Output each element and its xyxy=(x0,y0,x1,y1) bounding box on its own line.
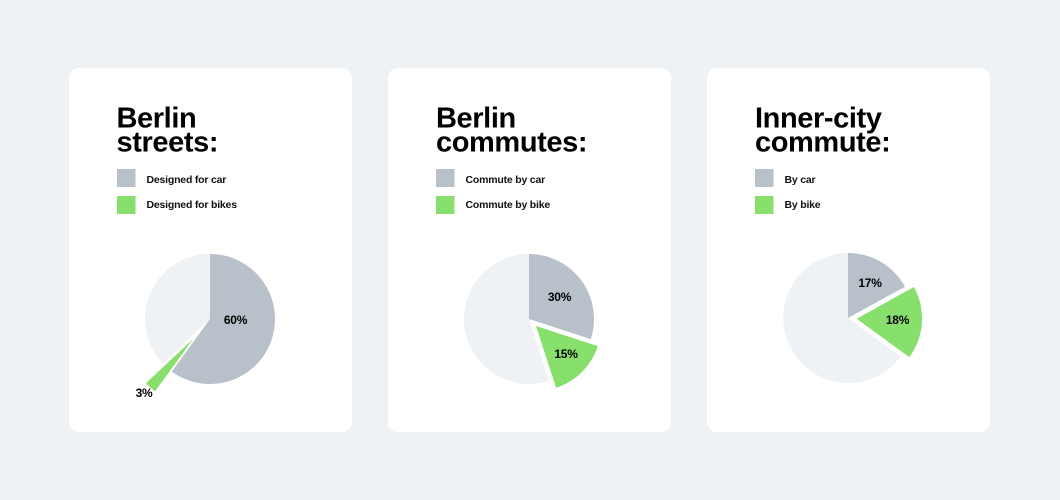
legend: Inner-city commute xyxy=(755,169,821,214)
legend: Berlin streets: Designed for car xyxy=(146,174,226,186)
pie chart: Inner-city commute: 18% xyxy=(886,313,910,327)
panel: Inner-city commute xyxy=(707,68,990,432)
heading: Berlin streets: Berlin xyxy=(116,102,196,134)
legend: Berlin commutes xyxy=(436,169,550,214)
heading: Inner-city commute: Inner-city xyxy=(755,102,882,134)
pie chart: Berlin streets: 60% xyxy=(224,313,248,327)
legend: Berlin commutes: Commute by car xyxy=(466,174,545,186)
pie chart: Berlin commutes: 30% xyxy=(548,290,572,304)
panel: Berlin commutes xyxy=(388,68,671,432)
pie chart: Berlin commutes: 15% xyxy=(554,347,578,361)
legend: Inner-city commute: By car xyxy=(784,174,816,186)
heading: Inner-city commute: commute: xyxy=(755,126,890,158)
pie chart: Berlin commutes xyxy=(464,254,598,388)
heading: Berlin commutes: Berlin xyxy=(436,102,516,134)
legend: Berlin streets xyxy=(117,169,237,214)
panel: Berlin streets xyxy=(69,68,352,432)
pie chart: Inner-city commute: 17% xyxy=(858,276,882,290)
heading: Berlin streets xyxy=(116,102,218,158)
heading: Inner-city commute xyxy=(755,102,890,158)
pie chart: Inner-city commute xyxy=(783,253,922,383)
legend: Inner-city commute: By bike xyxy=(784,199,821,211)
pie chart: Berlin streets xyxy=(136,254,275,400)
heading: Berlin streets: streets: xyxy=(116,126,218,158)
legend: Berlin streets: Designed for bikes xyxy=(146,199,237,211)
legend: Berlin commutes: Commute by bike xyxy=(466,199,550,211)
heading: Berlin commutes: commutes: xyxy=(436,126,587,158)
heading: Berlin commutes xyxy=(436,102,587,158)
pie chart: Berlin streets: 3% xyxy=(136,386,153,400)
